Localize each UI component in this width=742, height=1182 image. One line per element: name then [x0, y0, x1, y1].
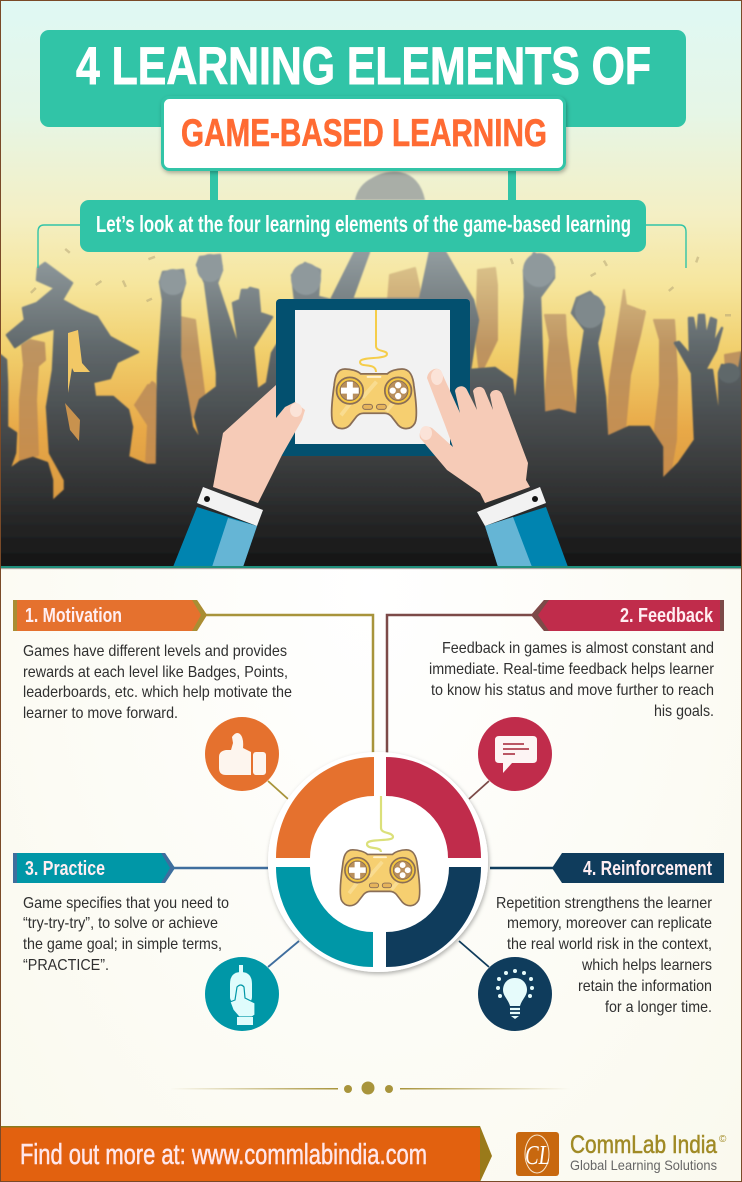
foreground crowd silhouette — [0, 252, 742, 567]
hero scene — [0, 0, 742, 567]
hero bottom rule — [0, 566, 742, 568]
left hand — [213, 385, 305, 503]
card: reinforcement — [478, 853, 724, 1031]
center gamepad — [340, 850, 420, 906]
segment: motivation — [276, 757, 374, 858]
segment: feedback — [386, 757, 481, 858]
banner — [531, 600, 724, 631]
logo monogram: CL — [525, 1140, 550, 1170]
body text: rewards at each level like Badges, Points, — [23, 664, 288, 681]
gamepad wire — [360, 310, 387, 372]
practice icon link — [268, 941, 299, 967]
card: feedback — [429, 600, 724, 791]
icon: speech bubble — [478, 717, 552, 791]
banner label: 1. Motivation — [25, 605, 122, 627]
right thumbnail — [420, 426, 432, 440]
body text — [429, 640, 715, 720]
icon: thumbs up — [205, 717, 279, 791]
body text: to know his status and move further to reach — [431, 682, 714, 699]
body text: leaderboards, etc. which help motivate the — [23, 684, 292, 701]
body text — [23, 895, 229, 974]
tablet screen — [295, 310, 450, 444]
logo: CommLab India — [516, 1131, 727, 1176]
banner label: 3. Practice — [25, 858, 105, 880]
body text: which helps learners — [581, 957, 712, 974]
right cuff — [477, 487, 546, 526]
confetti — [30, 248, 731, 316]
footer band — [0, 1126, 480, 1182]
banner edge — [531, 600, 724, 631]
connectors — [210, 168, 218, 202]
right connector — [508, 168, 516, 202]
arrow tip — [480, 1126, 492, 1182]
left bracket — [38, 225, 80, 268]
body text: Games have different levels and provides — [23, 643, 287, 660]
body text: the game goal; in simple terms, — [23, 936, 222, 953]
left cufflink — [204, 496, 210, 502]
logo square — [516, 1132, 559, 1176]
game-based learning text: GAME-BASED LEARNING — [181, 112, 547, 155]
footer text: Find out more at: www.commlabindia.com — [20, 1139, 427, 1171]
raised figure behind the heading — [355, 172, 425, 200]
brand name: CommLab India — [570, 1131, 717, 1159]
body text: memory, moreover can replicate — [507, 915, 712, 932]
banner label: 2. Feedback — [620, 605, 714, 627]
body text: retain the information — [578, 978, 712, 995]
tablet frame — [276, 299, 470, 456]
subtitle box — [80, 200, 646, 252]
central donut — [268, 752, 488, 972]
tagline: Global Learning Solutions — [570, 1157, 717, 1173]
title box — [40, 30, 686, 127]
white disc — [268, 752, 488, 972]
body text: Repetition strengthens the learner — [496, 895, 713, 912]
gamepad — [332, 369, 416, 429]
tablet with hands — [173, 299, 568, 567]
body text: his goals. — [654, 703, 714, 720]
body text: learner to move forward. — [23, 705, 178, 722]
banner — [552, 853, 724, 883]
right cufflink — [532, 496, 538, 502]
body text: immediate. Real-time feedback helps learner — [429, 661, 715, 678]
registered mark: © — [719, 1134, 727, 1145]
footer call to action — [0, 1126, 492, 1182]
banner edge — [13, 853, 175, 883]
title panel — [38, 30, 686, 268]
practice connector — [173, 867, 268, 869]
background crowd arms — [20, 268, 742, 480]
sky gradient — [0, 0, 742, 567]
banner — [13, 853, 175, 883]
body text: “try-try-try”, to solve or achieve — [23, 915, 218, 932]
banner edge — [13, 600, 207, 631]
left sleeve — [173, 507, 257, 567]
body text: “PRACTICE”. — [23, 957, 109, 974]
right fingernail — [431, 369, 443, 385]
reinforcement icon link — [459, 941, 489, 967]
left cuff — [197, 487, 263, 526]
game-based learning box — [162, 98, 564, 170]
band top edge — [0, 1126, 480, 1128]
feedback icon link — [469, 781, 489, 799]
body text — [496, 895, 713, 1016]
banner label: 4. Reinforcement — [583, 858, 712, 880]
reinforcement connector — [490, 867, 553, 869]
motivation connector — [205, 615, 373, 754]
body text: the real world risk in the context, — [507, 936, 712, 953]
right hand — [420, 369, 530, 503]
body text: Game specifies that you need to — [23, 895, 229, 912]
left thumbnail — [290, 403, 302, 417]
rounded fists — [160, 253, 740, 383]
left sleeve highlight — [212, 518, 257, 567]
logo swoosh — [525, 1135, 549, 1173]
body text: Feedback in games is almost constant and — [442, 640, 714, 657]
right sleeve highlight — [485, 517, 532, 567]
card: motivation — [13, 600, 292, 791]
body text: for a longer time. — [605, 999, 712, 1016]
icon: light bulb — [478, 957, 552, 1031]
segment: reinforcement — [386, 867, 481, 967]
gold gaps in silhouette — [68, 330, 90, 393]
right sleeve — [485, 507, 568, 567]
icon: hand on mouse — [205, 957, 279, 1031]
segment: practice — [276, 867, 373, 967]
right bracket — [646, 225, 686, 268]
body text — [23, 643, 292, 722]
card: practice — [13, 853, 279, 1031]
feedback connector — [387, 615, 533, 754]
motivation icon link — [268, 781, 288, 799]
banner — [13, 600, 207, 631]
connector lines — [173, 615, 553, 967]
center wire — [367, 796, 393, 852]
divider with dots — [170, 1082, 570, 1094]
